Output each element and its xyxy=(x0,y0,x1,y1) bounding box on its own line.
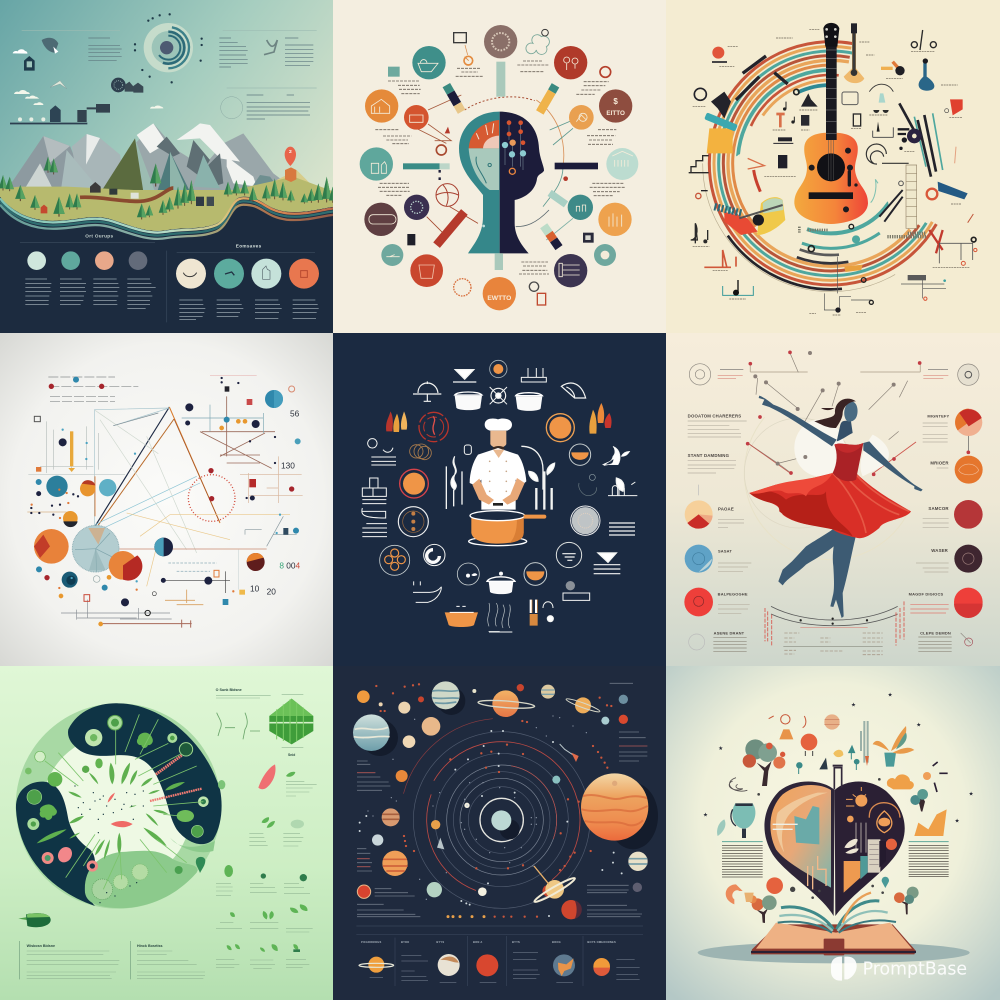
tightrope arcs xyxy=(765,601,904,655)
text blocks top xyxy=(22,31,317,119)
stars xyxy=(703,693,974,824)
filaments xyxy=(45,714,203,889)
green cells on dark xyxy=(25,715,225,900)
pale and red organisms xyxy=(42,755,202,872)
trees and plants xyxy=(743,721,928,923)
orbits xyxy=(377,695,626,945)
panel: human head with surrounding icons xyxy=(333,0,667,334)
bottom row planets xyxy=(359,954,610,976)
soft white disks xyxy=(794,420,889,476)
panel: solar system xyxy=(333,666,667,1000)
head left half xyxy=(459,112,500,253)
heading bottom center: Hinck Bosrtiss xyxy=(137,944,163,948)
bottom row text xyxy=(370,953,640,983)
number labels xyxy=(250,409,301,596)
dark lower left lobe xyxy=(16,782,95,906)
connectors xyxy=(416,57,573,240)
connector lines and dots xyxy=(698,353,968,591)
heart left map xyxy=(770,785,831,889)
guitar xyxy=(794,23,868,224)
headings xyxy=(688,414,951,636)
ringed planet lower right xyxy=(533,866,576,904)
left block shapes xyxy=(704,92,785,235)
number labels: 130 xyxy=(281,460,295,470)
icon circles xyxy=(360,25,638,310)
bottom column headings: BOOG xyxy=(552,940,561,944)
outer cell xyxy=(16,703,221,909)
panel: guitar and music rings xyxy=(656,0,1000,339)
dotted circle xyxy=(188,475,235,521)
PromptBase watermark: PromptBase xyxy=(863,960,967,980)
mountains xyxy=(7,123,310,213)
book spine bookmark xyxy=(824,939,844,955)
pie circles xyxy=(34,390,283,588)
number labels: 10 xyxy=(250,583,260,593)
number labels: 8 004 xyxy=(279,561,301,571)
icons floating xyxy=(717,714,948,904)
scattered dots xyxy=(31,378,292,624)
stars: ★ xyxy=(718,746,723,752)
stars: ★ xyxy=(888,693,893,699)
headings: PAOAE xyxy=(718,506,734,511)
circle captions xyxy=(487,97,625,302)
headings: STANT DAMDNING xyxy=(688,453,730,458)
dotted center xyxy=(75,786,143,903)
stars: ★ xyxy=(851,703,856,709)
headings: WASER xyxy=(931,548,949,553)
bottom column headings xyxy=(361,940,616,944)
heart right xyxy=(835,781,905,916)
bottom column headings: BYYS xyxy=(512,940,520,944)
panel: heart and open book xyxy=(666,666,1000,1000)
village houses xyxy=(41,182,214,213)
heading bottom left: Wisbosn Bidsne xyxy=(27,944,55,948)
headings: SAMCOR xyxy=(928,506,949,511)
circle captions: EITTO xyxy=(606,110,625,117)
road xyxy=(80,188,173,201)
large circles row xyxy=(176,259,319,289)
small guitar xyxy=(844,23,864,83)
small outline icons xyxy=(388,29,611,305)
planets top xyxy=(353,681,628,784)
blue guitar xyxy=(919,58,934,91)
dancer figure xyxy=(749,396,923,618)
left pie circles xyxy=(684,500,713,616)
right pie circles xyxy=(954,409,983,618)
inner pale field xyxy=(42,734,192,884)
panel: mountain landscape xyxy=(0,0,336,334)
sun planet center xyxy=(491,810,511,830)
headings: CLEPE DEMDN xyxy=(920,631,951,636)
dark base xyxy=(0,197,334,334)
heading small right: Snid xyxy=(288,753,295,757)
bottom column headings: BOYS OMEOORNES xyxy=(587,940,616,944)
flames xyxy=(386,403,612,442)
orange bowls and plates xyxy=(385,364,600,627)
filled pots xyxy=(425,392,542,594)
circle captions: EWTTO xyxy=(487,295,511,302)
large glass circle xyxy=(72,525,119,572)
dark upper lobe xyxy=(68,703,222,844)
music icons xyxy=(689,30,977,313)
panel: geometry diagram xyxy=(0,333,334,667)
outline dials xyxy=(689,364,979,650)
bottom column headings: BYDD xyxy=(401,940,409,944)
ground xyxy=(0,177,334,231)
panel: chef and kitchen icons xyxy=(333,333,667,667)
headings: BALPEGOGHE xyxy=(718,591,748,596)
body text lines xyxy=(688,370,952,651)
book cover xyxy=(751,924,916,954)
headings: ASENE DRANT xyxy=(714,631,745,636)
heart left xyxy=(764,781,835,916)
headings: MIGNTEFY xyxy=(927,414,950,419)
tiny captions xyxy=(693,29,969,315)
green body text lines xyxy=(19,694,317,979)
radar dial xyxy=(135,14,202,82)
panel: dancer xyxy=(666,333,1000,667)
right column plants xyxy=(224,772,308,952)
small squares xyxy=(34,386,301,616)
map pin xyxy=(285,147,296,182)
stars: ★ xyxy=(969,791,974,797)
panel: green cell diagram xyxy=(0,666,334,1000)
green leaf seed icon xyxy=(18,913,51,927)
book pages xyxy=(756,923,912,949)
head right half xyxy=(500,112,544,253)
headings: SASAT xyxy=(718,548,732,553)
text blocks xyxy=(722,842,949,877)
book pages fan xyxy=(778,893,896,933)
text snippets xyxy=(375,61,625,274)
headings: MRIOER xyxy=(930,460,949,465)
dark section text lines xyxy=(20,243,319,322)
planets mid xyxy=(357,744,648,919)
headings: MAGDF DIGIOCS xyxy=(909,591,943,596)
gradient bars xyxy=(403,62,598,270)
headings: DOOATOM CHARERERS xyxy=(688,414,741,419)
small circles row xyxy=(27,251,147,270)
map pin: 2 xyxy=(289,149,292,155)
section heading left: Ort Ourups xyxy=(85,234,113,239)
giant orange planet xyxy=(581,773,648,841)
circle captions: $ xyxy=(613,97,618,106)
diamond diagram xyxy=(217,699,313,744)
number labels: 20 xyxy=(267,586,276,596)
bottom column headings: PIXARORIRES xyxy=(361,940,382,944)
heading top right: O Sunk Bidsne xyxy=(216,688,242,692)
bottom column headings: BON A xyxy=(473,940,482,944)
stars: ★ xyxy=(916,723,921,729)
icons sky xyxy=(10,38,277,124)
left panel text xyxy=(357,683,647,917)
white line icons xyxy=(362,360,637,632)
book base line xyxy=(751,948,916,955)
heart right art xyxy=(844,787,900,893)
stars: ★ xyxy=(955,818,960,824)
stars and moons xyxy=(360,684,622,917)
outer music rings xyxy=(702,40,944,292)
bottom column headings: BYYS xyxy=(436,940,444,944)
lower light lobe xyxy=(85,851,197,908)
number labels: 56 xyxy=(290,409,300,419)
chef xyxy=(470,418,526,510)
ground shadow xyxy=(698,942,970,963)
trees xyxy=(0,157,336,219)
PromptBase watermark xyxy=(831,957,967,981)
brain sections xyxy=(469,120,523,227)
stars: ★ xyxy=(703,813,708,819)
radial organisms xyxy=(37,763,185,859)
triangle and construction lines xyxy=(27,376,303,628)
main pot xyxy=(469,511,546,546)
wave stripes xyxy=(0,198,334,239)
pink organism xyxy=(258,764,276,789)
circle glyphs xyxy=(369,33,633,278)
section heading right: Eomsaves xyxy=(236,244,262,249)
shadows xyxy=(361,687,658,849)
divider xyxy=(356,926,643,986)
